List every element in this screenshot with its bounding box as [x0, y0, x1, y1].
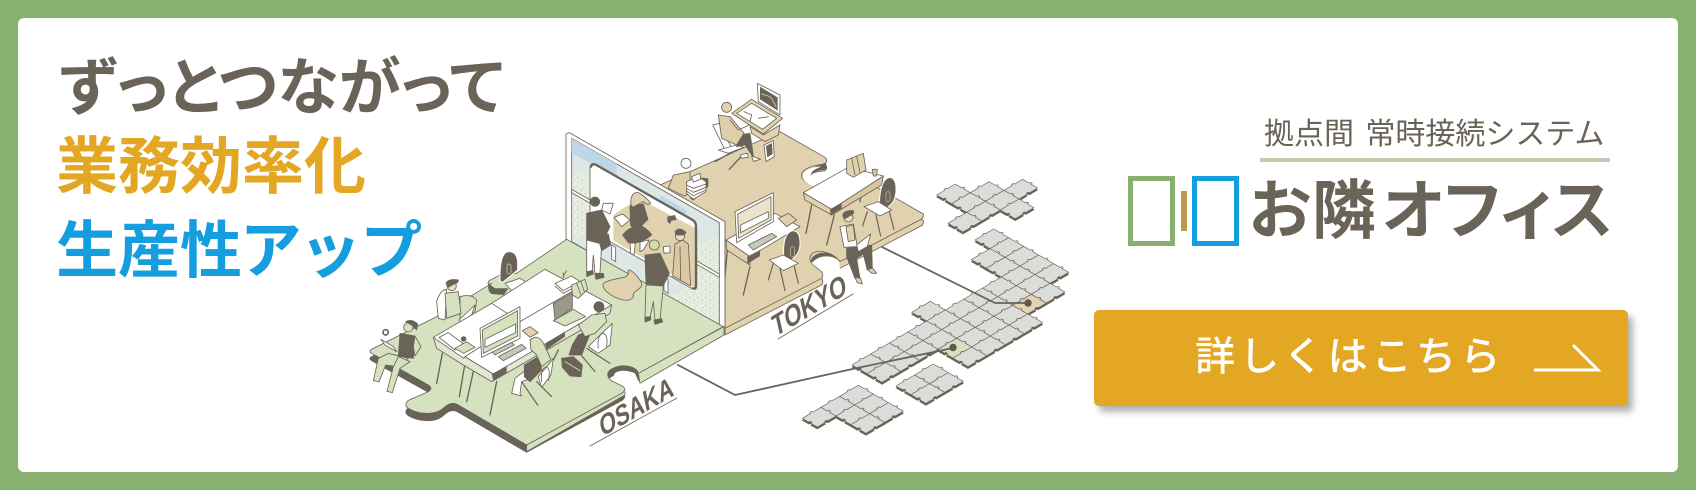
man reading on ledge: [373, 320, 421, 393]
Osaka desks and people: [373, 252, 612, 415]
label: TOKYO: TOKYO: [769, 268, 849, 343]
logo: tan bar: [1181, 191, 1187, 231]
heading: line 1: ずっとつながって: [59, 54, 504, 123]
person: standing with tablet: [587, 197, 613, 279]
person with box stack: [668, 158, 708, 201]
connector: Tokyo to map: [882, 247, 1032, 307]
rug: [603, 270, 642, 300]
logo mark: [1128, 176, 1239, 246]
Tokyo office platform: [660, 83, 923, 335]
man with bag: [562, 302, 612, 377]
map: Shikoku tiles: [895, 362, 965, 405]
Osaka office platform: [370, 239, 724, 452]
desks: [433, 269, 612, 415]
subtitle: 拠点間 常時接続システム: [1264, 118, 1604, 151]
items on desk: [439, 271, 588, 353]
laptop: [553, 293, 586, 326]
person at drafting table: [713, 83, 783, 169]
woman at front desk: [512, 337, 553, 405]
icon: monitor: [757, 83, 780, 115]
person seated with laptop: [840, 211, 877, 284]
person with laptop at back: [437, 280, 477, 323]
chair at back: [500, 252, 528, 291]
map: Honshu tiles: [806, 227, 1100, 402]
heading: line 2: 業務効率化: [56, 133, 366, 202]
button: [1094, 310, 1628, 406]
label: OSAKA: OSAKA: [597, 371, 676, 443]
button label: 詳しくはこちら: [1195, 335, 1504, 379]
monitor: [480, 307, 538, 361]
map: Kyushu tiles: [801, 384, 905, 446]
people standing in front of the wall: [587, 197, 670, 324]
glass wall with video screen: [566, 133, 725, 333]
logo: green screen: [1128, 176, 1175, 246]
logo text: オフィス: オフィス: [1382, 174, 1613, 247]
heading: line 3: 生産性アップ: [56, 217, 424, 286]
video screen: [590, 164, 697, 289]
map: Hokkaido tiles: [917, 160, 1054, 243]
Japan puzzle map: [801, 160, 1100, 446]
logo text: お隣: お隣: [1248, 175, 1376, 247]
desk with books and chair: [803, 153, 896, 245]
logo: blue screen: [1192, 176, 1239, 246]
subtitle underline: [1260, 158, 1610, 162]
icon: arrow: [1534, 344, 1602, 372]
desk with monitor and chair: [725, 193, 800, 295]
connector: Osaka to map: [678, 344, 957, 395]
person: green-haired man: [645, 240, 670, 324]
